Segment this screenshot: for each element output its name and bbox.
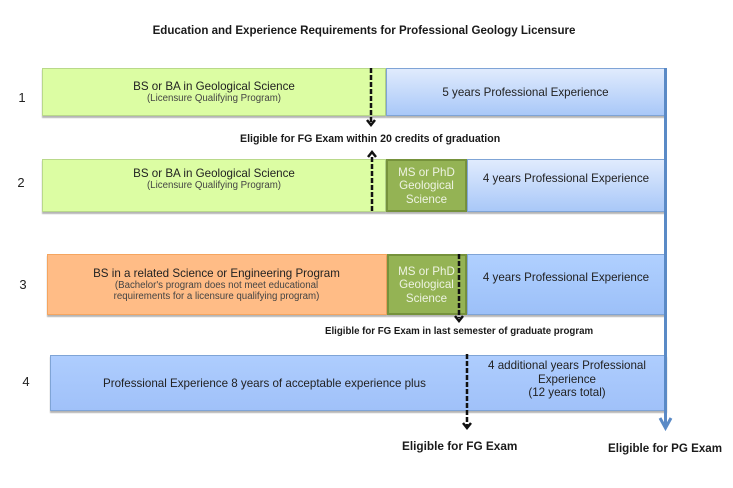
row number 4: 4 xyxy=(22,374,30,389)
row 3: MS or PhD xyxy=(387,254,467,315)
row 3: MS or PhD: Science xyxy=(406,292,447,305)
row 2: MS or PhD xyxy=(386,159,467,212)
row 4: 4 additional years text: Experience xyxy=(538,372,596,386)
eligibility label: PG exam: Eligible for PG Exam xyxy=(608,442,722,455)
row 3: professional experience xyxy=(467,254,665,315)
row 4: 8 years text: Professional Experience 8 years of acceptable experience plus xyxy=(103,377,426,390)
row 3: related BS program: requirements for a licensure qualifying program) xyxy=(114,291,319,302)
row number 2: 2 xyxy=(17,175,25,190)
title: Education and Experience Requirements for Professional Geology Licensure xyxy=(153,25,575,37)
arrow: PG exam blue line xyxy=(660,68,671,428)
row 4: 4 additional years text xyxy=(488,359,646,399)
row 1: BS or BA program: (Licensure Qualifying Program) xyxy=(147,93,281,104)
eligibility label: last semester: Eligible for FG Exam in last semester of graduate program xyxy=(325,326,593,337)
row 4: 4 additional years text: 4 additional years Professional xyxy=(488,359,646,372)
arrow: row 3 FG dashed xyxy=(455,254,463,321)
arrow: row 2 FG dashed xyxy=(368,152,376,211)
row 3: related BS program: (Bachelor's program does not meet educational xyxy=(115,280,318,291)
row 2: BS or BA program: BS or BA in Geological Science xyxy=(133,167,295,180)
row 2: professional experience xyxy=(467,159,665,212)
arrow: row 4 FG dashed xyxy=(463,354,471,428)
row 2: BS or BA program xyxy=(42,159,386,212)
row 2: MS or PhD: MS or PhD xyxy=(398,166,455,179)
row 4: 4 additional years text: (12 years total) xyxy=(528,386,606,399)
row 1: professional experience: 5 years Professional Experience xyxy=(442,86,609,98)
eligibility label: within 20 credits: Eligible for FG Exam within 20 credits of graduation xyxy=(240,133,500,145)
row 3: related BS program: BS in a related Science or Engineering Program xyxy=(93,267,340,280)
eligibility label: FG exam: Eligible for FG Exam xyxy=(402,439,517,453)
row 3: MS or PhD: MS or PhD xyxy=(398,265,455,278)
row 3: related BS program xyxy=(47,254,387,315)
row 2: MS or PhD: Geological xyxy=(399,179,454,192)
row 3: MS or PhD: Geological xyxy=(399,278,454,291)
arrow: row 1 FG dashed xyxy=(367,68,375,125)
row 2: MS or PhD: Science xyxy=(406,193,447,206)
row 1: BS or BA program: BS or BA in Geological Science xyxy=(133,80,295,93)
row number 1: 1 xyxy=(18,90,26,105)
row 1: BS or BA program xyxy=(42,68,386,116)
row number 3: 3 xyxy=(19,277,27,292)
row 2: professional experience: 4 years Professional Experience xyxy=(483,172,649,185)
row 1: professional experience xyxy=(386,68,665,116)
row 2: BS or BA program: (Licensure Qualifying Program) xyxy=(147,180,281,191)
row 3: professional experience: 4 years Professional Experience xyxy=(483,271,649,284)
row 4: professional experience bar xyxy=(50,355,667,411)
